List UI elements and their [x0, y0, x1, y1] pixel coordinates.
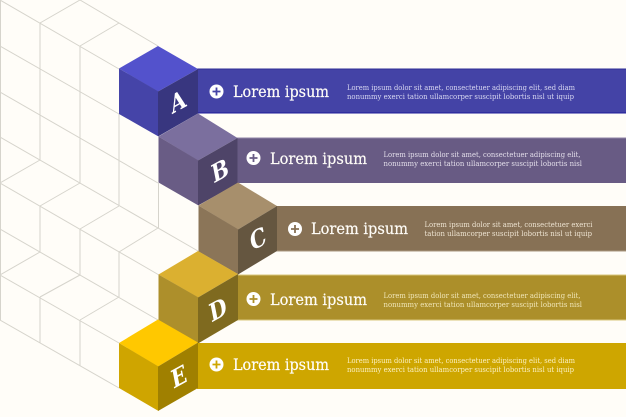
text block D [384, 291, 582, 309]
text block E: Lorem ipsum dolor sit amet, consectetuer adipiscing elit, sed diam [347, 356, 576, 365]
icon: plus E [210, 358, 224, 372]
text block A: nonummy exerci tation ullamcorper suscipit lobortis nisl ut iquip [347, 92, 574, 101]
isometric background grid [0, 0, 198, 388]
letter D: D [207, 292, 229, 329]
letter C: C [248, 221, 268, 257]
letter B: B [209, 153, 231, 190]
text block D: Lorem ipsum dolor sit amet, consectetuer adipiscing elit, [384, 291, 580, 300]
cube C [198, 182, 277, 274]
row E [119, 320, 626, 411]
letter E: E [169, 359, 189, 395]
heading E: Lorem ipsum [233, 355, 329, 374]
letter A: A [167, 84, 189, 121]
cube E [119, 320, 198, 411]
row B [158, 114, 626, 206]
cube A [119, 46, 198, 136]
text block E: nonummy exerci tation ullamcorper suscipit lobortis nisl ut iquip [347, 365, 574, 374]
cube B [158, 114, 238, 206]
text block B [384, 150, 582, 168]
ribbon D [237, 274, 626, 320]
heading C: Lorem ipsum [311, 219, 408, 238]
text block B: Lorem ipsum dolor sit amet, consectetuer adipiscing elit, [384, 150, 580, 159]
heading B: Lorem ipsum [270, 149, 367, 168]
ribbon A [197, 68, 626, 114]
ribbon B [236, 138, 626, 183]
text block A [347, 83, 576, 101]
text block C: Lorem ipsum dolor sit amet, consectetuer exerci [424, 220, 593, 229]
text block D: nonummy exerci tation ullamcorper suscipit lobortis nisl [384, 300, 582, 309]
text block E [347, 356, 576, 374]
icon: plus A [210, 84, 224, 98]
text block C [424, 220, 593, 238]
heading A: Lorem ipsum [233, 82, 329, 101]
row D [158, 251, 626, 344]
icon: plus C [288, 222, 302, 236]
text block A: Lorem ipsum dolor sit amet, consectetuer adipiscing elit, sed diam [347, 83, 576, 92]
icon: plus B [246, 151, 260, 165]
row C [198, 182, 626, 274]
heading D: Lorem ipsum [270, 290, 367, 309]
ribbon E [197, 343, 626, 389]
text block B: nonummy exerci tation ullamcorper suscipit lobortis nisl [384, 159, 582, 168]
icon: plus D [246, 292, 260, 306]
ribbon C [276, 206, 626, 252]
cube D [158, 251, 238, 344]
row A [119, 46, 626, 136]
text block C: tation ullamcorper suscipit lobortis nisl ut iquip [424, 229, 592, 238]
